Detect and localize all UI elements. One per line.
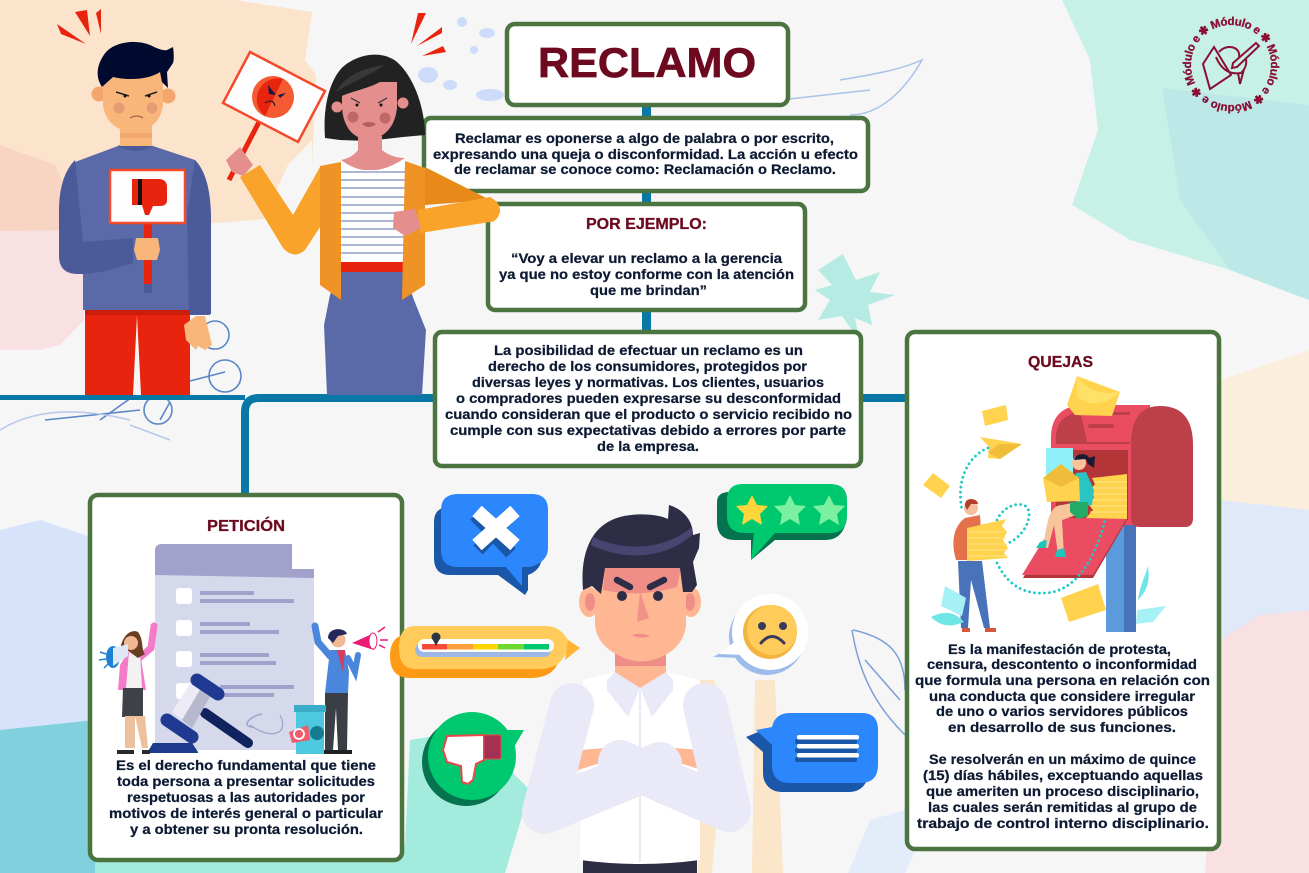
icon: angry woman with sign xyxy=(223,13,500,395)
text: petición xyxy=(109,757,384,837)
text: quejas: en desarrollo de sus funciones. xyxy=(948,719,1176,735)
text: quejas xyxy=(915,641,1210,831)
icon: text message bubble xyxy=(746,713,878,792)
panel: definition: de reclamar se conoce como: Reclamación o Reclamo. xyxy=(454,161,836,177)
text: petición: Es el derecho fundamental que tiene xyxy=(116,757,376,773)
icon: rating slider bubble xyxy=(390,626,580,678)
panel: consumer rights: derecho de los consumidores, protegidos por xyxy=(488,358,808,374)
icon: thumbs-down bubble xyxy=(422,712,524,806)
illustration: mailbox xyxy=(923,376,1193,632)
panel: consumer rights: cuando consideran que el producto o servicio recibido no xyxy=(445,406,852,422)
text: quejas: que ameriten un proceso disciplinario, xyxy=(926,783,1199,799)
text: quejas: (15) días hábiles, exceptuando aquellas xyxy=(923,767,1203,783)
text: petición: respetuosas a las autoridades por xyxy=(127,789,366,805)
connector lines xyxy=(0,100,910,500)
text: quejas: Se resolverán en un máximo de quince xyxy=(929,751,1196,767)
woman with megaphone xyxy=(99,626,154,754)
man with papers xyxy=(953,499,1008,632)
panel: definition: Reclamar es oponerse a algo de palabra o por escrito, xyxy=(455,130,834,146)
title: RECLAMO xyxy=(538,39,756,86)
icon: sad face bubble xyxy=(713,594,808,675)
panel: example: ya que no estoy conforme con la atención xyxy=(499,266,794,282)
panel: example: que me brindan” xyxy=(590,282,707,298)
panel: consumer rights xyxy=(435,332,861,466)
text: petición: motivos de interés general o particular xyxy=(109,805,384,821)
heading: quejas: QUEJAS xyxy=(1028,354,1093,371)
panel: example xyxy=(488,204,805,310)
panel: consumer rights: de la empresa. xyxy=(597,438,699,454)
icon: confused man with crossed arms xyxy=(544,505,729,873)
panel: definition: expresando una queja o disconformidad. La acción u efecto xyxy=(433,146,858,162)
panel: example: “Voy a elevar un reclamo a la gerencia xyxy=(511,250,782,266)
panel: example: POR EJEMPLO: xyxy=(586,216,707,233)
panel: consumer rights: La posibilidad de efectuar un reclamo es un xyxy=(494,342,803,358)
panel: definition xyxy=(424,118,868,191)
text: quejas: una conducta que considere irregular xyxy=(929,688,1196,704)
panel: quejas xyxy=(907,332,1219,849)
man with megaphone xyxy=(315,626,388,754)
panel: consumer rights: o compradores pueden expresarse su desconformidad xyxy=(456,390,841,406)
text: petición: toda persona a presentar solicitudes xyxy=(117,773,375,789)
heading: petición: PETICIÓN xyxy=(207,516,285,535)
text: quejas: las cuales serán remitidas al grupo de xyxy=(928,799,1197,815)
icon: three-star bubble xyxy=(717,484,847,560)
ballot box xyxy=(289,705,326,754)
icon: X speech bubble xyxy=(434,494,548,595)
leaves xyxy=(931,566,1166,625)
illustration: document with gavel and protesters xyxy=(99,544,388,754)
logo: Módulo e: ✱ Módulo e ✱ Módulo e ✱ Módulo e ✱ Módulo e xyxy=(1182,16,1280,114)
text: quejas: que formula una persona en relación con xyxy=(915,672,1210,688)
text: petición: y a obtener su pronta resolución. xyxy=(130,821,363,837)
panel: petición xyxy=(90,495,402,860)
text: quejas: Es la manifestación de protesta, xyxy=(948,641,1171,657)
text: quejas: trabajo de control interno disciplinario. xyxy=(917,815,1209,831)
panel: consumer rights: cumple con sus expectativas debido a errores por parte xyxy=(450,422,846,438)
text: quejas: de uno o varios servidores públicos xyxy=(936,703,1188,719)
title box xyxy=(507,24,788,105)
icon: angry man with thumbs-down sign xyxy=(57,9,212,395)
text: quejas: censura, descontento o inconformidad xyxy=(927,656,1197,672)
panel: consumer rights: diversas leyes y normativas. Los clientes, usuarios xyxy=(472,374,824,390)
